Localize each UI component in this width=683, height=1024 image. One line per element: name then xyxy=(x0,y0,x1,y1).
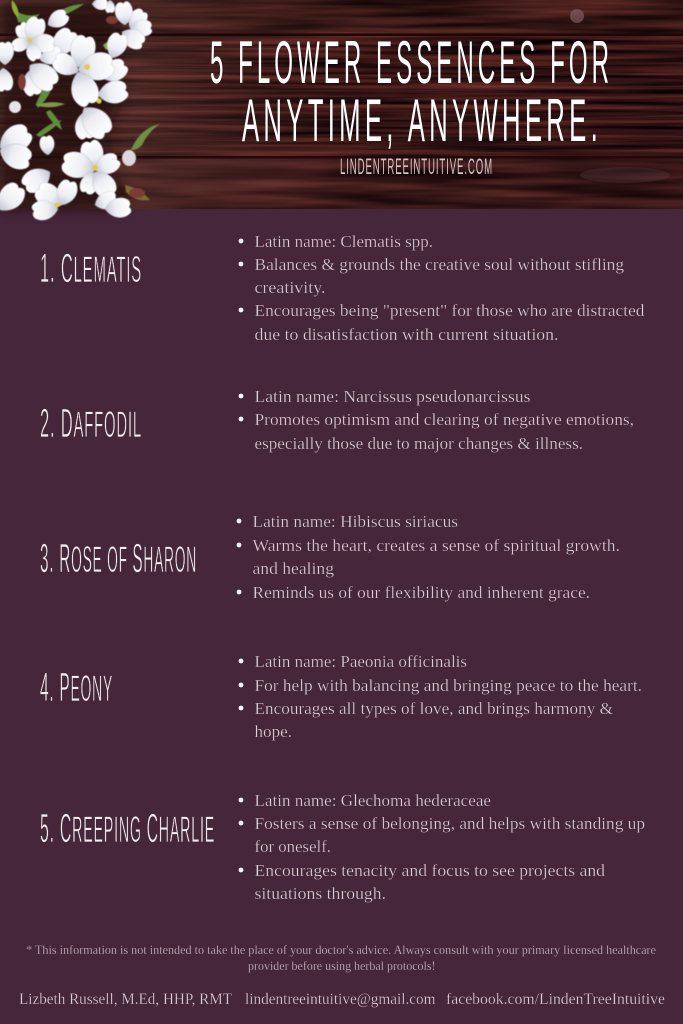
section: 2 Daffodil xyxy=(40,387,634,453)
disclaimer xyxy=(26,943,656,973)
title xyxy=(210,29,613,154)
section: 1 Clematis xyxy=(40,232,645,344)
header: white blossom branch xyxy=(0,0,160,221)
list: Creeping Charlie facts: for oneself. xyxy=(254,837,331,856)
footer: contact details: Lizbeth Russell, M.Ed, HHP, RMT xyxy=(19,991,233,1008)
section: 4 Peony xyxy=(40,652,642,741)
list: Rose of Sharon facts: Warms the heart, creates a sense of spiritual growth. xyxy=(252,536,620,555)
blossom: bottom edge xyxy=(31,177,132,221)
heading: Clematis: 1. CLEMATIS xyxy=(40,245,142,291)
blossom: lower centre xyxy=(59,139,123,202)
footer: contact details: lindentreeintuitive@gmail.com xyxy=(245,991,436,1008)
footer: contact details xyxy=(19,991,665,1008)
list: Peony facts: For help with balancing and bringing peace to the heart. xyxy=(254,676,642,695)
list: Rose of Sharon facts xyxy=(237,512,620,602)
disclaimer: * xyxy=(26,943,32,957)
blossom: upper left xyxy=(11,14,55,63)
list: Daffodil facts: Promotes optimism and clearing of negative emotions, xyxy=(254,410,634,429)
list: Peony facts: Encourages all types of love, and brings harmony & xyxy=(254,699,613,718)
list: Peony facts: Latin name: Paeonia officinalis xyxy=(254,652,467,671)
dark shade behind branch xyxy=(0,0,125,209)
stamens xyxy=(27,37,102,208)
list: Creeping Charlie facts xyxy=(239,791,645,903)
list: Creeping Charlie facts: situations through. xyxy=(254,884,386,903)
section: 5 Creeping Charlie xyxy=(40,791,645,903)
heading: Rose of Sharon: 3. ROSE OF SHARON xyxy=(40,535,197,581)
list: Rose of Sharon facts: Reminds us of our flexibility and inherent grace. xyxy=(252,583,590,602)
list: Creeping Charlie facts: Latin name: Glechoma hederaceae xyxy=(254,791,491,810)
blossom: centre xyxy=(49,32,117,143)
list: Daffodil facts xyxy=(239,387,634,453)
leaves xyxy=(12,0,160,200)
list: Clematis facts: Latin name: Clematis spp. xyxy=(254,232,433,251)
disclaimer: This information is not intended to take the place of your doctor's advice. Always consult with your primary licensed healthcare xyxy=(35,943,656,957)
list: Clematis facts: creativity. xyxy=(254,278,326,297)
list: Rose of Sharon facts: and healing xyxy=(252,559,335,578)
list: Rose of Sharon facts: Latin name: Hibiscus siriacus xyxy=(252,512,458,531)
heading: Daffodil: 2. DAFFODIL xyxy=(40,400,142,446)
heading: Creeping Charlie: 5. CREEPING CHARLIE xyxy=(40,805,215,851)
list: Clematis facts xyxy=(239,232,645,344)
list: Creeping Charlie facts: Encourages tenacity and focus to see projects and xyxy=(254,861,606,880)
blossoms back layer xyxy=(0,0,152,106)
list: Peony facts: hope. xyxy=(254,722,292,741)
list: Clematis facts: Balances & grounds the creative soul without stifling xyxy=(254,255,625,274)
text: LINDENTREEINTUITIVE.COM xyxy=(340,154,493,179)
footer: contact details: facebook.com/LindenTreeIntuitive xyxy=(446,991,665,1008)
buds xyxy=(9,16,145,198)
blossom: lower left xyxy=(0,120,56,218)
list: Daffodil facts: especially those due to major changes & illness. xyxy=(254,434,583,453)
header: wood plank background xyxy=(0,0,683,209)
section: 3 Rose of Sharon xyxy=(40,512,620,602)
list: Creeping Charlie facts: Fosters a sense of belonging, and helps with standing up xyxy=(254,814,645,833)
list: Peony facts xyxy=(239,652,642,741)
list: Clematis facts: due to disatisfaction with current situation. xyxy=(254,325,558,344)
list: Clematis facts: Encourages being "present" for those who are distracted xyxy=(254,301,645,320)
heading: Peony: 4. PEONY xyxy=(40,664,113,710)
list: Daffodil facts: Latin name: Narcissus pseudonarcissus xyxy=(254,387,530,406)
disclaimer: provider before using herbal protocols! xyxy=(248,959,436,973)
